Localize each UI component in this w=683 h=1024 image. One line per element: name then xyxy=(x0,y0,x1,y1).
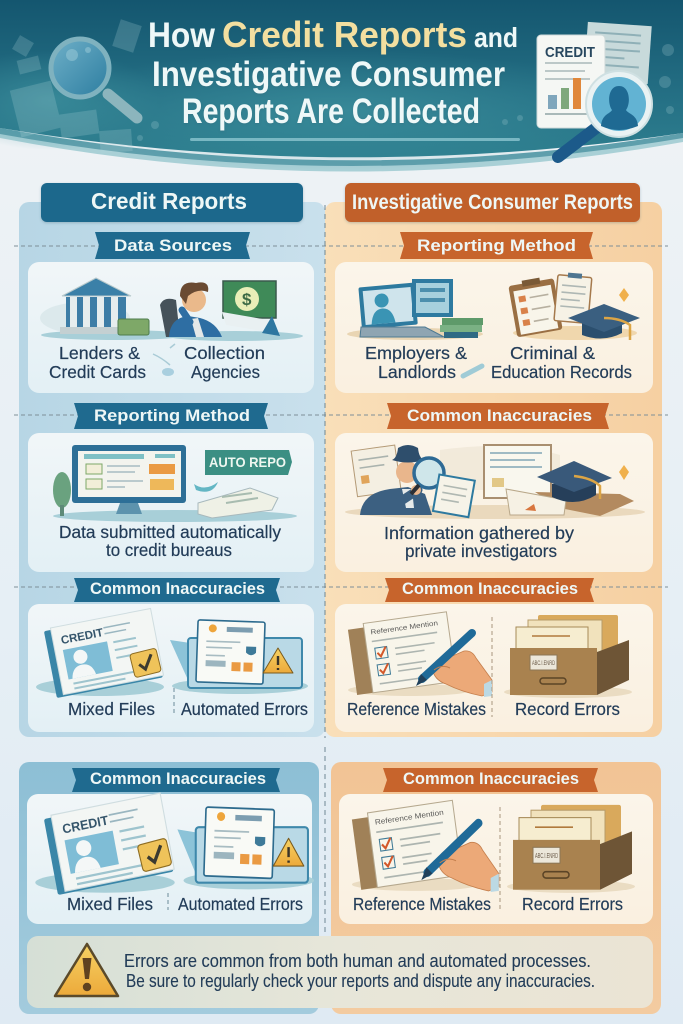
label: information gathered: Information gathered by xyxy=(384,523,574,543)
text: warning message xyxy=(124,951,595,991)
label: criminal and education records: Criminal & xyxy=(510,343,595,363)
label: collection agencies: Collection xyxy=(184,343,265,363)
icon: lower credit file with check xyxy=(35,793,175,895)
card: lower reference mistakes and record errors xyxy=(339,794,653,924)
card: mixed files and automated errors xyxy=(28,604,314,732)
banner: common inaccuracies third row right: Common Inaccuracies xyxy=(402,579,578,598)
banner: common inaccuracies third row left: Common Inaccuracies xyxy=(90,579,265,598)
title: How xyxy=(148,16,216,55)
title: Credit Reports xyxy=(222,14,467,55)
label: employers and landlords: Employers & xyxy=(365,343,467,363)
card: data sources xyxy=(28,262,314,393)
label: lenders and credit cards: Credit Cards xyxy=(49,362,146,382)
icon: left magnifying glass xyxy=(51,39,137,118)
panel: investigative consumer reports column xyxy=(325,202,662,737)
icon: laptop and screens xyxy=(347,279,483,340)
icon: automated error documents xyxy=(170,620,308,694)
heading: investigative consumer reports xyxy=(345,183,640,222)
label: data submitted xyxy=(59,522,281,560)
icon: lower reference checklist with pen: Reference Mention xyxy=(374,807,444,827)
card: reporting method xyxy=(28,433,314,572)
banner: data sources: Data Sources xyxy=(114,236,232,255)
icon: credit file with check: CREDIT xyxy=(60,627,104,647)
label: criminal and education records xyxy=(491,343,632,382)
card: private investigators xyxy=(335,433,653,572)
icon: collection agent at desk xyxy=(160,281,303,341)
text: warning message: Errors are common from both human and automated processes. xyxy=(124,951,591,971)
icon: lower automated error documents xyxy=(177,807,314,889)
banner: lower common inaccuracies right xyxy=(383,768,598,792)
banner: reporting method right xyxy=(400,232,593,259)
section dividers xyxy=(14,246,668,587)
title: Investigative Consumer xyxy=(152,55,505,94)
label: lower reference mistakes: Reference Mistakes xyxy=(353,894,491,914)
banner: reporting method right: Reporting Method xyxy=(417,236,576,255)
icon: archive box with files: ABC.I.ENRD xyxy=(532,660,555,667)
icon: monitor with auto report: AUTO REPO xyxy=(209,454,286,470)
banner: lower common inaccuracies left: Common Inaccuracies xyxy=(90,769,266,788)
icon: warning triangle xyxy=(55,944,118,996)
panel: lower investigative column xyxy=(331,762,661,1014)
label: employers and landlords xyxy=(365,343,467,382)
banner: reporting method left xyxy=(74,403,268,429)
banner: common inaccuracies third row right xyxy=(385,578,594,602)
banner: lower common inaccuracies left xyxy=(72,768,280,792)
panel: lower credit column xyxy=(19,762,319,1014)
label: lenders and credit cards: Lenders & xyxy=(59,343,140,363)
icon: lower reference checklist with pen xyxy=(351,800,499,892)
label: data submitted: to credit bureaus xyxy=(106,540,232,560)
banner: reporting method left: Reporting Method xyxy=(94,406,250,425)
label: employers and landlords: Landlords xyxy=(378,362,456,382)
label: criminal and education records: Education Records xyxy=(491,362,632,382)
label: lower mixed files: Mixed Files xyxy=(67,894,153,914)
card: reporting method sources xyxy=(335,262,653,393)
icon: lower credit file with check: CREDIT xyxy=(61,812,110,837)
heading: credit reports xyxy=(41,183,303,222)
icon: credit file with check xyxy=(36,609,164,698)
header decoration: faded papers xyxy=(10,19,674,153)
panel: credit reports column xyxy=(19,202,325,737)
title: and xyxy=(474,22,518,53)
banner: common inaccuracies right: Common Inaccuracies xyxy=(407,406,592,425)
icon: archive box with files xyxy=(504,615,632,698)
label: information gathered: private investigators xyxy=(405,541,557,561)
label: mixed files: Mixed Files xyxy=(68,699,155,719)
icon: credit document with magnifier xyxy=(537,22,652,157)
card: lower mixed files and automated errors xyxy=(27,793,314,924)
card: reference mistakes and record errors xyxy=(335,604,653,732)
heading: credit reports: Credit Reports xyxy=(91,188,247,214)
header banner xyxy=(0,0,683,172)
icon: credit document with magnifier: CREDIT xyxy=(545,44,595,61)
label: collection agencies: Agencies xyxy=(191,362,260,382)
label: information gathered xyxy=(384,523,574,561)
heading: investigative consumer reports: Investigative Consumer Reports xyxy=(352,191,633,214)
label: lower record errors: Record Errors xyxy=(522,894,623,914)
title xyxy=(148,14,518,131)
label: data submitted: Data submitted automatically xyxy=(59,522,281,542)
icon: bank xyxy=(40,278,189,340)
label: record errors: Record Errors xyxy=(515,699,620,719)
callout: warning message xyxy=(27,936,653,1008)
banner: lower common inaccuracies right: Common Inaccuracies xyxy=(403,769,579,788)
icon: investigator with magnifier xyxy=(345,445,645,519)
icon: lower archive box with files xyxy=(507,805,635,893)
icon: clipboards and graduation cap xyxy=(508,272,640,340)
icon: lower archive box with files: ABC.I.ENRD xyxy=(535,853,558,860)
banner: common inaccuracies third row left xyxy=(74,578,280,602)
label: lower automated errors: Automated Errors xyxy=(178,894,303,914)
label: reference mistakes: Reference Mistakes xyxy=(347,699,486,719)
text: warning message: Be sure to regularly check your reports and dispute any inaccuracies. xyxy=(126,971,595,991)
label: collection agencies xyxy=(184,343,265,382)
label: automated errors: Automated Errors xyxy=(181,699,308,719)
icon: reference checklist with pen xyxy=(347,612,492,697)
title underline xyxy=(190,138,520,141)
icon: reference checklist with pen: Reference Mention xyxy=(370,620,439,637)
icon: collection agent at desk: $ xyxy=(242,290,252,309)
icon: monitor with auto report xyxy=(53,445,297,522)
banner: data sources xyxy=(95,232,250,259)
banner: common inaccuracies right xyxy=(387,403,609,429)
title: Reports Are Collected xyxy=(182,92,480,131)
label: lenders and credit cards xyxy=(49,343,146,382)
